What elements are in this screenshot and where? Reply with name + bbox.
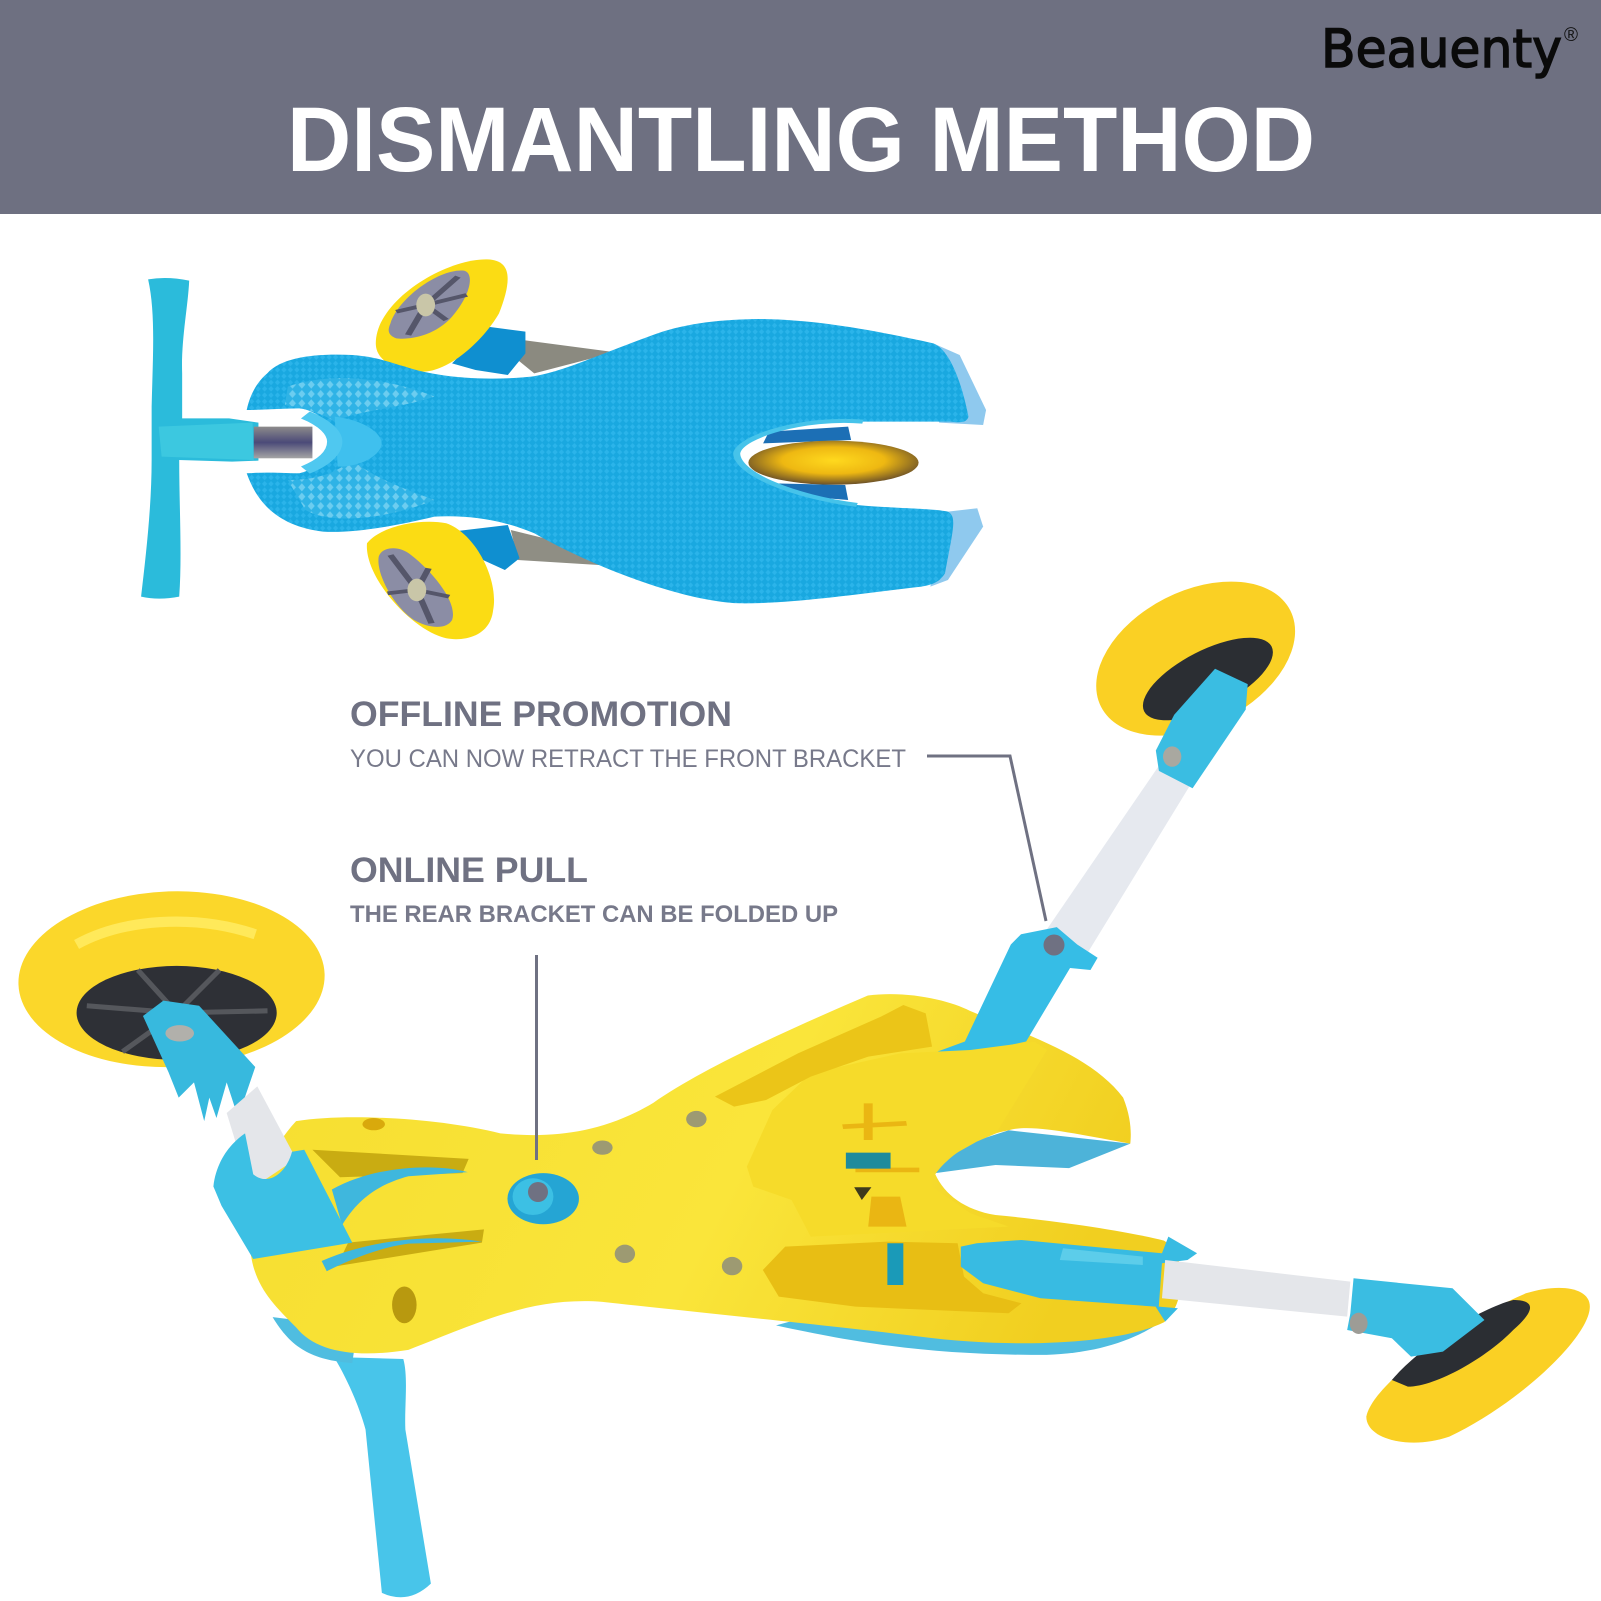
callout body: rear bracket: THE REAR BRACKET CAN BE FOLDED UP bbox=[350, 901, 838, 928]
top-view scooter photo bbox=[141, 259, 986, 639]
head highlights bbox=[285, 378, 434, 519]
rear right tube bbox=[1162, 1260, 1350, 1317]
blue deck shell underside bbox=[273, 1130, 1174, 1363]
rear left wheel bbox=[15, 886, 328, 1072]
brand logo: Beauenty bbox=[1321, 19, 1562, 80]
folding handlebar bbox=[334, 1357, 431, 1597]
lower front wheel bbox=[367, 522, 494, 639]
yellow deck underside bbox=[250, 994, 1181, 1353]
steering collar bbox=[213, 1133, 352, 1259]
rear left tube bbox=[227, 1086, 296, 1190]
rear right elbow bbox=[1347, 1278, 1484, 1357]
callout heading: online pull: ONLINE PULL bbox=[350, 850, 588, 890]
deck screws and holes bbox=[362, 1009, 978, 1323]
centre mechanism bbox=[843, 1103, 919, 1285]
front upper tube bbox=[1044, 766, 1190, 965]
handlebar neck bbox=[159, 423, 254, 460]
raised plate bbox=[747, 1042, 1047, 1237]
leader line: rear bracket bbox=[528, 955, 548, 1202]
callout text: online pull bbox=[350, 850, 838, 928]
header band bbox=[0, 0, 1601, 214]
lower recess bbox=[763, 1242, 1021, 1313]
rear left fork bbox=[143, 1001, 255, 1123]
title: DISMANTLING METHOD bbox=[287, 89, 1315, 191]
rear right wheel bbox=[1366, 1288, 1590, 1443]
leader line: front bracket bbox=[927, 756, 1064, 956]
front upper elbow bbox=[1156, 669, 1248, 788]
underside scooter photo bbox=[15, 550, 1321, 1597]
rear right bracket bbox=[961, 1237, 1197, 1322]
upper recess bbox=[715, 1005, 932, 1107]
handlebar bbox=[141, 278, 258, 599]
deck rims bbox=[930, 343, 986, 587]
front upper wheel bbox=[1070, 550, 1321, 767]
rear wheel in notch bbox=[748, 427, 919, 500]
front upper socket bbox=[937, 927, 1098, 1052]
right-side deck details bbox=[715, 1005, 1590, 1443]
callout heading: offline promotion: OFFLINE PROMOTION bbox=[350, 694, 732, 734]
callout text: offline promotion bbox=[350, 694, 906, 773]
brand logo: ® bbox=[1564, 25, 1578, 46]
head collar bbox=[305, 415, 382, 470]
callout body: front bracket: YOU CAN NOW RETRACT THE FRONT BRACKET bbox=[350, 745, 906, 773]
rear slots bbox=[312, 1150, 484, 1271]
notch lip bbox=[737, 421, 863, 505]
bracket ridges bbox=[1060, 1248, 1143, 1265]
upper front wheel bbox=[376, 259, 508, 372]
deck release button bbox=[507, 1173, 579, 1224]
deck bbox=[247, 319, 968, 603]
steering tube bbox=[254, 427, 312, 458]
lower front tube and bracket bbox=[452, 525, 599, 570]
upper front tube and bracket bbox=[452, 327, 611, 375]
